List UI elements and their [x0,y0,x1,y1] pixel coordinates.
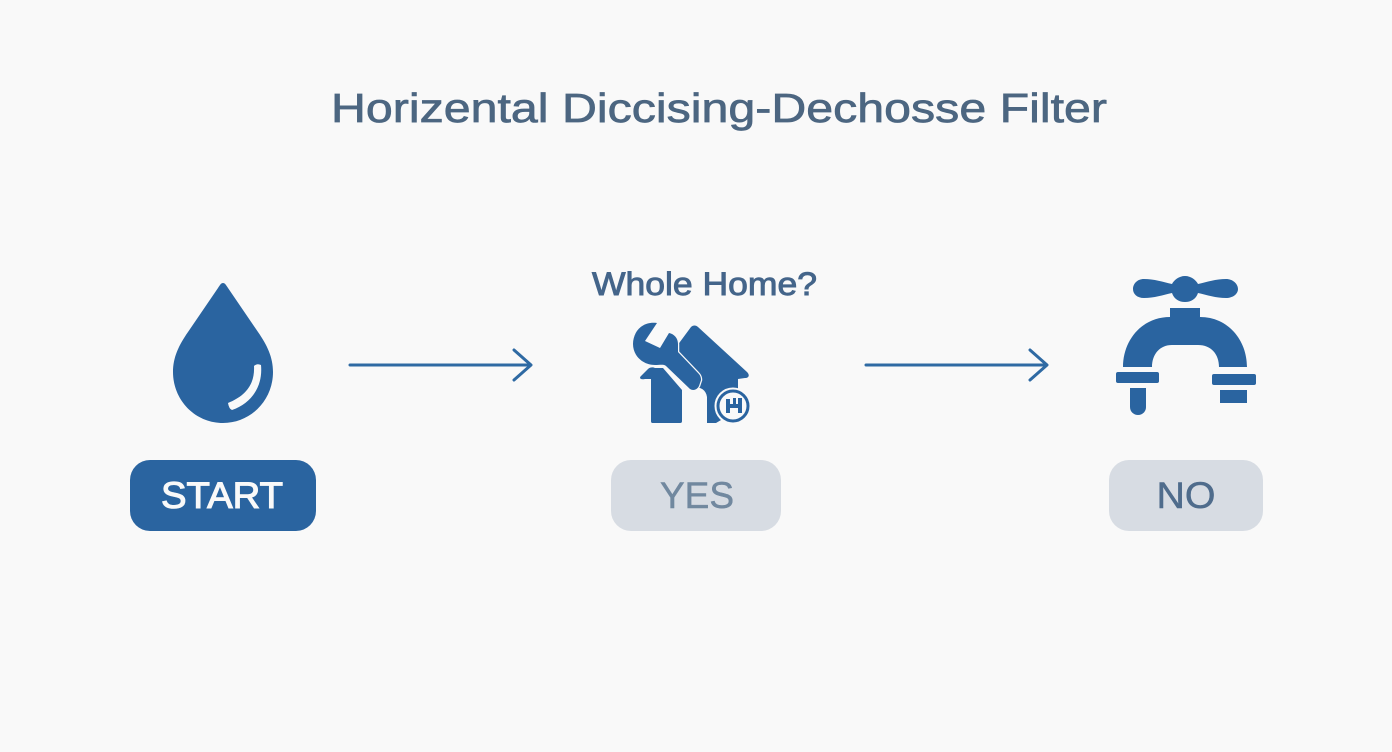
no button: NO [1156,475,1216,516]
right stub [1220,390,1247,403]
left spout [1130,388,1146,415]
icon: faucet [1116,276,1256,415]
left flange [1116,372,1159,383]
right flange [1212,374,1256,385]
icon: water drop [173,283,273,423]
faucet arched body [1123,308,1247,367]
faucet handle [1133,276,1238,302]
yes button [611,460,781,531]
start button [130,460,316,531]
wrench [633,323,701,390]
arrow: start to whole home [350,350,531,380]
house left wing [640,367,682,423]
yes button: YES [660,475,734,516]
arrow: whole home to faucet [866,350,1047,380]
title: Horizental Diccising-Dechosse Filter [331,85,1107,131]
decision label: whole home: Whole Home? [592,266,817,302]
house roof and right wall [674,326,749,423]
start button: START [161,475,283,516]
no button [1109,460,1263,531]
icon: house with wrench [633,323,749,423]
hose bib badge [718,390,748,422]
